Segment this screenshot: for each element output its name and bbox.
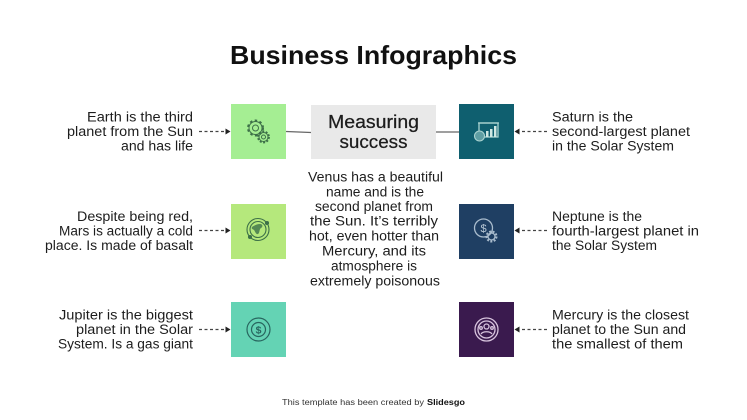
text block: Mercury: the smallest of them: [552, 336, 683, 352]
icon tile: dollar gear: $: [480, 223, 487, 235]
text block: Venus: name and is the: [326, 184, 424, 200]
text block: Mars: Despite being red,: [77, 209, 193, 224]
icon tile: gears: [231, 104, 286, 159]
connector: left square to center box: [286, 132, 311, 133]
heading: measuring success: Measuring: [328, 112, 419, 132]
text block: Mars: place. Is made of basalt: [45, 238, 193, 253]
text block: Mercury: planet to the Sun and: [552, 322, 686, 337]
panel: measuring success: [311, 105, 436, 159]
arrow: Saturn: [515, 130, 547, 132]
text block: Saturn: Saturn is the: [552, 110, 633, 124]
text block: Jupiter: planet in the Solar: [76, 322, 194, 337]
text block: Saturn: in the Solar System: [552, 138, 674, 154]
icon tile: presentation chart: [459, 104, 514, 159]
text block: Earth: planet from the Sun: [67, 124, 193, 139]
text block: Mars: Mars is actually a cold: [59, 224, 193, 238]
text block: Venus: the Sun. It’s terribly: [310, 214, 438, 228]
heading: measuring success: [328, 112, 419, 152]
icon tile: dollar cycle: $: [256, 324, 262, 336]
text block: Venus: extremely poisonous: [310, 274, 440, 288]
footer credit: [282, 398, 465, 407]
text block: Jupiter: System. Is a gas giant: [58, 336, 193, 352]
arrow: Earth: [199, 130, 230, 132]
text block: Neptune: Neptune is the: [552, 209, 642, 224]
title: Business Infographics: [230, 40, 517, 70]
icon tile: globe: [231, 204, 286, 259]
text block: Jupiter: [58, 308, 194, 352]
connector: center box to right square: [436, 131, 459, 133]
text block: Neptune: [552, 209, 699, 253]
heading: measuring success: success: [340, 132, 408, 152]
icon tile: dollar gear: [459, 204, 514, 259]
text block: Mercury: Mercury is the closest: [552, 308, 689, 322]
text block: Venus: second planet from: [315, 199, 433, 214]
text block: Saturn: [552, 110, 690, 154]
arrow: Mercury: [515, 328, 547, 330]
text block: Mercury: [552, 308, 689, 352]
text block: Neptune: the Solar System: [552, 238, 657, 253]
text block: Venus: Venus has a beautiful: [308, 170, 443, 184]
text block: Earth: [67, 110, 193, 154]
text block: Saturn: second-largest planet: [552, 124, 690, 139]
text block: Neptune: fourth-largest planet in: [552, 224, 699, 238]
text block: Venus: hot, even hotter than: [309, 228, 439, 244]
icon tile: badge: [459, 302, 514, 357]
arrow: Jupiter: [199, 328, 230, 330]
text block: Mars: [45, 209, 193, 253]
arrow: Mars: [199, 230, 230, 232]
text block: Earth: Earth is the third: [87, 110, 193, 124]
text block: Venus: atmosphere is: [331, 258, 417, 274]
icon tile: dollar cycle: [231, 302, 286, 357]
footer credit: Slidesgo: [427, 398, 465, 407]
text block: Venus: Mercury, and its: [322, 244, 426, 258]
text block: Jupiter: Jupiter is the biggest: [59, 308, 193, 322]
text block: Earth: and has life: [121, 138, 193, 154]
arrow: Neptune: [515, 230, 547, 232]
text block: Venus: [308, 170, 443, 288]
footer credit: This template has been created by: [282, 398, 424, 407]
